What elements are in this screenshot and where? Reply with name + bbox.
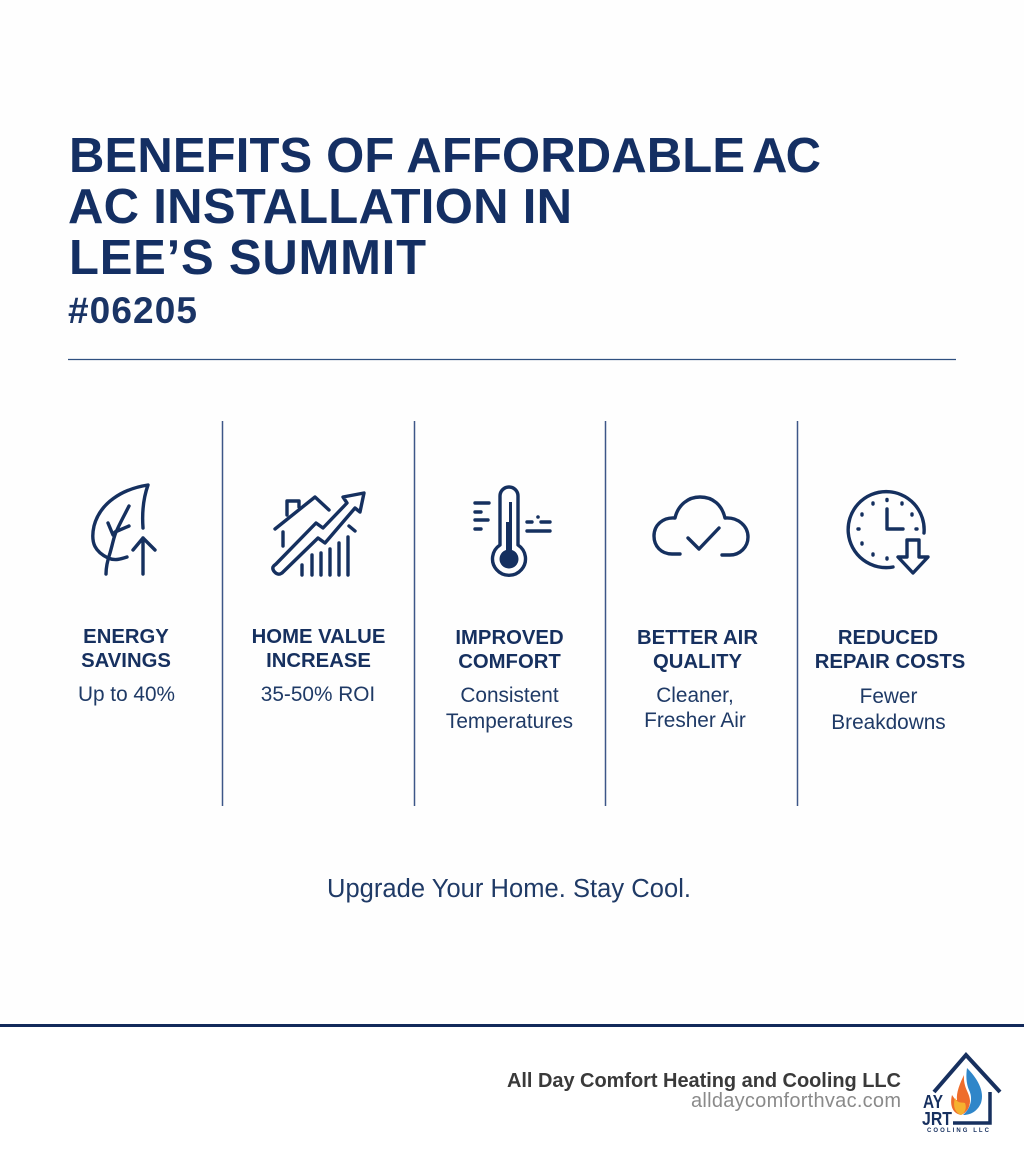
icon: clock with down arrow	[848, 492, 928, 573]
icon: thermometer	[475, 487, 550, 575]
heading: REDUCED	[838, 627, 938, 649]
title: AC INSTALLATION IN	[68, 180, 572, 234]
footer	[0, 1024, 1024, 1154]
panel: improved comfort	[446, 487, 573, 733]
heading: REPAIR COSTS	[815, 651, 965, 673]
title: LEE’S SUMMIT	[69, 231, 426, 285]
description: 35-50% ROI	[261, 683, 375, 706]
title: BENEFITS OF AFFORDABLE	[69, 129, 745, 183]
heading: ENERGY	[83, 626, 169, 648]
logo	[922, 1055, 1000, 1134]
logo: COOLING LLC	[927, 1128, 990, 1134]
subtitle code: #06205	[68, 290, 197, 331]
heading: INCREASE	[266, 650, 371, 672]
description: Up to 40%	[78, 683, 175, 706]
description: Fewer	[860, 685, 917, 708]
heading: COMFORT	[458, 651, 561, 673]
description: Temperatures	[446, 710, 573, 733]
description: Breakdowns	[831, 711, 946, 734]
description: Cleaner,	[656, 684, 734, 707]
logo: AY	[923, 1092, 943, 1112]
heading: QUALITY	[653, 651, 742, 673]
heading: SAVINGS	[81, 650, 171, 672]
panel: home value increase	[252, 493, 385, 706]
icon: house with rising arrow and bars	[273, 493, 364, 575]
description: Consistent	[460, 684, 559, 707]
description: Fresher Air	[644, 709, 746, 732]
heading: IMPROVED	[455, 627, 564, 649]
title	[68, 129, 821, 285]
icon: leaf with up arrow	[93, 485, 155, 574]
panel: reduced repair costs	[815, 492, 965, 734]
website: alldaycomforthvac.com	[691, 1090, 901, 1112]
logo: JRT	[922, 1109, 952, 1129]
panel: energy savings	[78, 485, 175, 706]
title: AC	[752, 129, 821, 183]
company name: All Day Comfort Heating and Cooling LLC	[507, 1070, 901, 1092]
heading: HOME VALUE	[252, 626, 385, 648]
heading: BETTER AIR	[637, 627, 758, 649]
icon: cloud with check	[654, 497, 748, 555]
panel: better air quality	[637, 497, 758, 732]
tagline: Upgrade Your Home. Stay Cool.	[327, 875, 691, 903]
